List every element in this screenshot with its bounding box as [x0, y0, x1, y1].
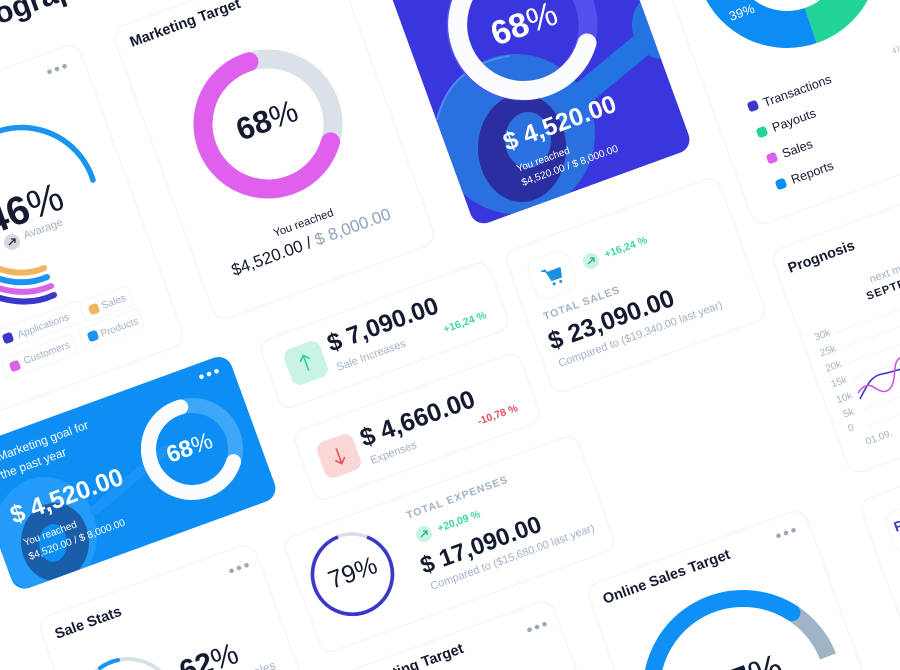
legend chip: applications — [0, 300, 87, 352]
x axis label: 01.09. — [864, 428, 894, 448]
menu dots — [527, 621, 547, 633]
panel: blue marketing goal — [0, 353, 279, 593]
y axis labels: 15k — [830, 374, 849, 390]
change: -10,78 % — [476, 402, 520, 428]
legend chip: customers — [0, 334, 79, 380]
menu dots — [47, 63, 67, 75]
donut label: 39% — [727, 1, 757, 24]
legend chip: products: Products — [99, 316, 140, 340]
legend: sales: Sales — [780, 137, 815, 161]
progress ring — [148, 406, 236, 493]
comparison: Compared to ($15,680.00 last year) — [429, 522, 596, 593]
progress ring — [312, 534, 392, 614]
panel: prognosis — [770, 149, 900, 476]
amount: $ 23,090.00 — [544, 284, 678, 356]
icon: up arrow — [282, 339, 330, 387]
y axis labels: 0 — [847, 422, 856, 435]
panel: average card — [0, 42, 186, 442]
amount: $ 17,090.00 — [417, 511, 545, 580]
reached amount: $4,520.00 / $ 8,000.00 — [27, 517, 127, 563]
panel: total sales — [503, 175, 768, 395]
legend: transactions: Transactions — [761, 72, 833, 110]
panel: sale increases — [258, 260, 511, 411]
legend chip: sales: Sales — [100, 293, 128, 312]
y axis labels: 20k — [824, 359, 844, 375]
ring value: 79% — [324, 551, 381, 595]
average badge: Avarage — [22, 217, 64, 242]
gauge arc — [0, 128, 93, 180]
amount: $ 7,090.00 — [324, 293, 442, 358]
label: Expenses — [369, 439, 419, 467]
legend chip: applications: Applications — [16, 312, 71, 341]
icon: cart — [525, 248, 579, 302]
reached label: You reached — [515, 145, 571, 175]
trend badge — [583, 234, 650, 269]
panel: pie legend card — [649, 0, 900, 227]
average badge — [4, 217, 64, 250]
legend: payouts: Payouts — [770, 106, 818, 135]
label: TOTAL SALES — [542, 284, 622, 323]
card title: Prognosis — [786, 238, 857, 277]
panel: marketing target lower — [332, 598, 632, 670]
amount: $ 4,520.00 — [499, 90, 620, 157]
stacked arcs — [0, 258, 54, 302]
change: +16,24 % — [442, 309, 489, 336]
y axis labels: 10k — [835, 390, 855, 406]
illustration: key — [0, 450, 165, 593]
panel: expenses — [292, 351, 543, 503]
y axis labels — [813, 327, 856, 435]
reached amount: $4,520.00 / $ 8,000.00 — [229, 204, 393, 280]
card title: Sale Stats — [53, 604, 124, 643]
donut chart — [714, 0, 860, 29]
icon: down arrow — [315, 432, 363, 480]
legend: reports — [775, 159, 835, 190]
y axis labels: 30k — [813, 327, 833, 343]
card title: Online Sales Target — [601, 547, 733, 608]
gauge — [652, 598, 828, 670]
menu dots — [199, 368, 219, 380]
panel: total expenses — [282, 433, 617, 655]
line chart — [813, 310, 900, 448]
y axis labels: 25k — [819, 343, 838, 359]
trend badge: +16,24 % — [603, 234, 650, 261]
panel: online sales target — [585, 508, 892, 670]
ring value: 68% — [163, 427, 216, 468]
reached label: You reached — [22, 519, 78, 549]
legend: reports: Reports — [789, 159, 835, 187]
amount: $ 4,660.00 — [356, 385, 479, 453]
label: Sale Increases — [335, 337, 408, 374]
legend chip: sales — [79, 285, 135, 323]
ring value: 68% — [231, 92, 303, 148]
card heading: the past year — [0, 445, 68, 482]
amount: $ 4,520.00 — [6, 463, 127, 530]
panel: marketing target — [111, 0, 437, 322]
icon tile — [883, 501, 900, 554]
label: TOTAL EXPENSES — [405, 474, 510, 522]
panel: bottom right card — [858, 420, 900, 670]
comparison: Compared to ($19,340.00 last year) — [557, 299, 724, 370]
legend: payouts — [756, 106, 818, 138]
illustration: key — [436, 2, 661, 214]
y axis labels: 5k — [842, 406, 856, 420]
legend chip: products — [78, 308, 145, 350]
menu dots — [229, 562, 249, 574]
progress ring — [203, 59, 333, 189]
trend badge — [416, 508, 483, 542]
reached label: You reached — [272, 207, 335, 240]
panel: sale stats — [37, 542, 334, 670]
legend chip: customers: Customers — [22, 340, 71, 367]
menu dots — [776, 527, 796, 539]
trend badge: +20,09 % — [436, 508, 483, 535]
progress ring — [456, 0, 588, 91]
ring — [80, 659, 176, 670]
panel: indigo target card — [369, 0, 693, 227]
legend: sales — [766, 137, 815, 164]
reached amount: $4,520.00 / $ 8,000.00 — [520, 143, 620, 189]
